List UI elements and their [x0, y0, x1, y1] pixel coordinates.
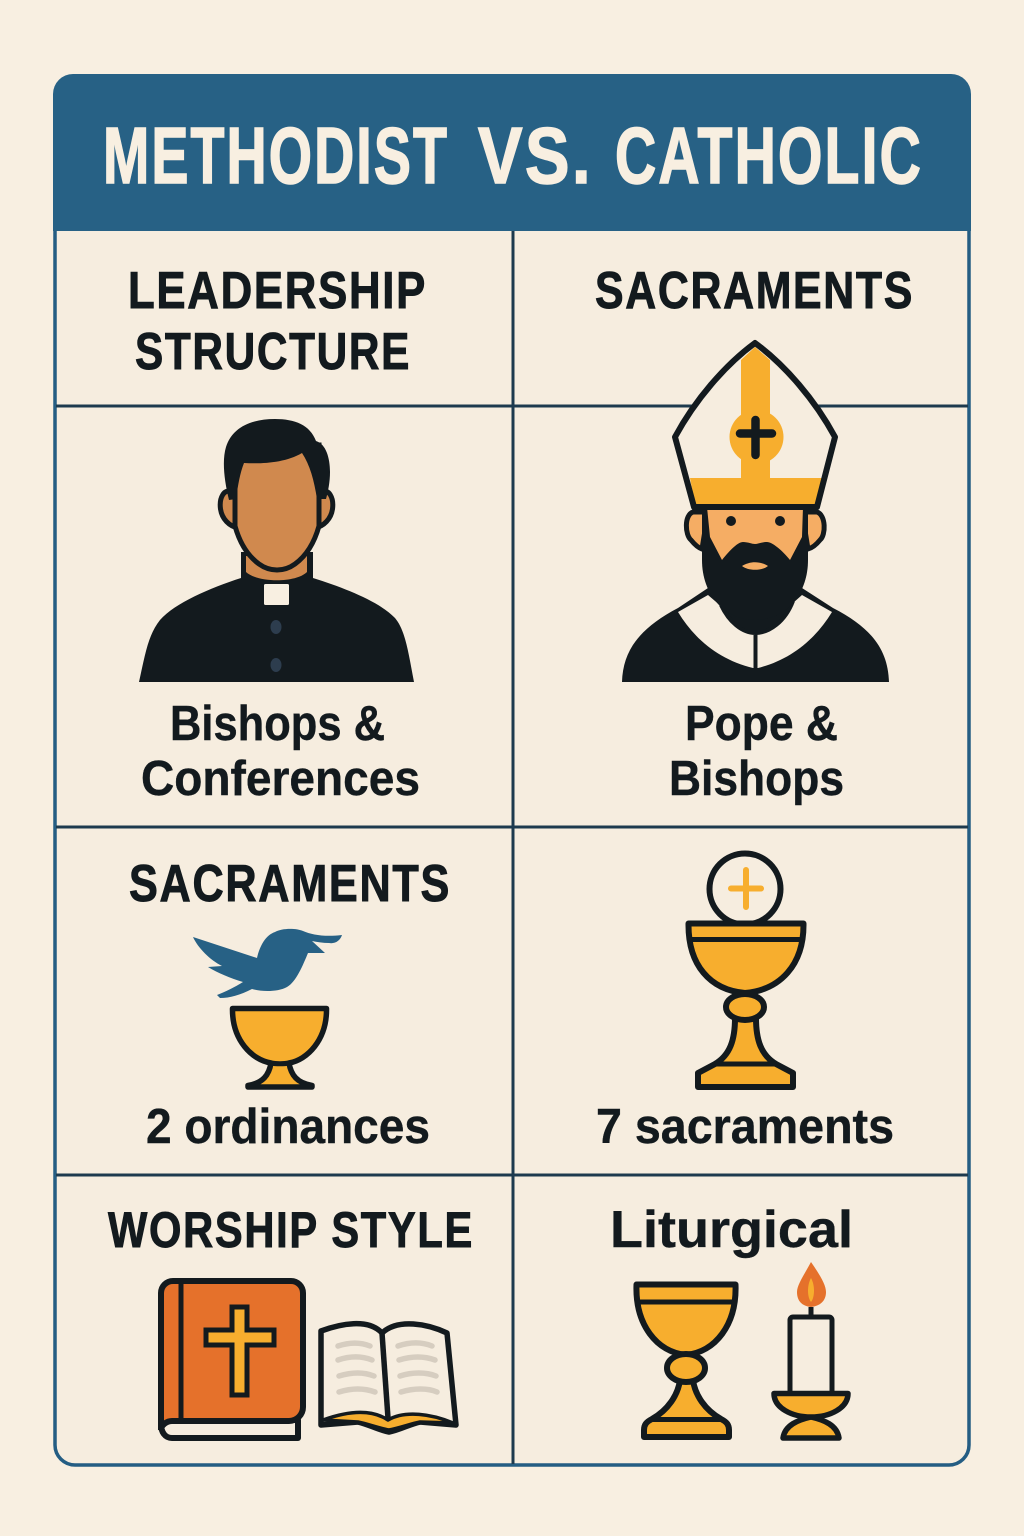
title banner: VS. [478, 111, 593, 200]
icon: Pope with mitre [622, 343, 889, 682]
label: Bishops & Conferences [141, 697, 420, 806]
label: liturgical: Liturgical [610, 1201, 853, 1259]
icon: open Bible [321, 1324, 456, 1432]
icon: orange Bible [161, 1281, 303, 1438]
label: Pope & Bishops: Bishops [669, 752, 844, 806]
heading: sacraments (top right): SACRAMENTS [595, 262, 914, 320]
label: Bishops & Conferences: Bishops & [170, 697, 385, 751]
icon: lit candle [774, 1262, 848, 1438]
heading: leadership structure: LEADERSHIP [128, 262, 427, 320]
heading: sacraments (left): SACRAMENTS [129, 855, 451, 913]
icon: small communion cup [232, 1008, 327, 1087]
title banner: METHODIST [103, 111, 449, 200]
title banner [53, 74, 971, 231]
label: Bishops & Conferences: Conferences [141, 752, 420, 806]
heading: leadership structure [128, 262, 427, 381]
label: 7 sacraments: 7 sacraments [596, 1100, 894, 1154]
label: Pope & Bishops: Pope & [685, 697, 838, 751]
heading: leadership structure: STRUCTURE [135, 323, 411, 381]
icon: chalice with host [688, 854, 804, 1087]
icon: dove [193, 929, 342, 998]
label: Pope & Bishops [669, 697, 844, 806]
label: 2 ordinances: 2 ordinances [146, 1100, 430, 1154]
icon: liturgical chalice [636, 1284, 736, 1437]
icon: Methodist minister [139, 419, 414, 682]
heading: worship style: WORSHIP STYLE [108, 1202, 474, 1258]
